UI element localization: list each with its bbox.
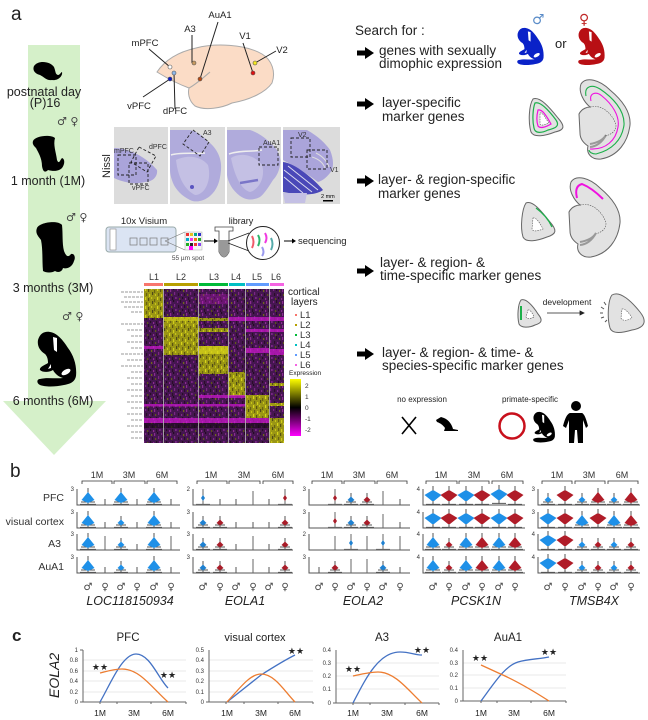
region labels: AuA1 [208, 10, 232, 21]
violin gene: EOLA1: EOLA1 [225, 594, 265, 608]
chart: PFC [70, 632, 186, 718]
arrow 5 [357, 348, 374, 360]
violin gene: LOC118150934: ♀ [101, 582, 109, 593]
chart: A3: A3 [375, 632, 389, 644]
icon: 1 month monkey [33, 136, 64, 172]
label: primate-specific: primate-specific [502, 395, 558, 404]
heading: search for: Search for : [355, 23, 425, 38]
violin gene: TMSB4X: ♀ [627, 582, 635, 593]
row labels: AuA1 [38, 561, 64, 573]
label: 10x Visium: 10x Visium [121, 216, 167, 227]
cortical layers legend: cortical [288, 287, 320, 298]
cortical layers legend: L2 [300, 320, 311, 331]
layer labels [149, 272, 281, 282]
violin gene: EOLA2: 3 [303, 555, 307, 561]
violin gene: LOC118150934: 3 [71, 555, 75, 561]
violin gene: PCSK1N: 4 [417, 510, 421, 516]
expression colorbar: -1 [305, 416, 311, 423]
text: layer specific: layer-specific [382, 95, 461, 110]
panel label b: b [10, 461, 21, 482]
heatmap [121, 272, 322, 443]
label: development: development [543, 297, 592, 307]
text: layer region time: time-specific marker genes [380, 268, 542, 283]
violin gene: PCSK1N: ♂ [429, 582, 438, 593]
violin gene: EOLA2: ♂ [347, 582, 356, 593]
chart: visual cortex: 0.1 [196, 690, 205, 696]
text: layer region time: layer- & region- & [380, 255, 485, 270]
chart: PFC: 3M [128, 708, 140, 718]
chart: visual cortex: 0.2 [196, 679, 205, 685]
icon: red monkey [578, 28, 605, 65]
icon: X [402, 417, 416, 434]
violin gene: EOLA2: 3 [303, 487, 307, 493]
label: 6 months: 6 months (6M) [13, 394, 93, 408]
violin gene: EOLA2: ♀ [363, 582, 371, 593]
chart: visual cortex: 0 [201, 700, 205, 706]
column separators [164, 289, 270, 443]
violin gene: EOLA1: 3 [187, 510, 191, 516]
Nissl sections [114, 127, 340, 204]
section with dashes [608, 294, 644, 332]
section labels: dPFC [149, 144, 167, 151]
male symbol: ♂ [532, 12, 545, 28]
icon: red circle [500, 414, 524, 438]
section labels [114, 130, 339, 200]
violin gene: PCSK1N: ♀ [511, 582, 519, 593]
chart: AuA1: 6M [543, 708, 555, 718]
label: no expression: no expression [397, 395, 447, 404]
violin gene: LOC118150934: 3 [71, 487, 75, 493]
layer labels: L1 [149, 272, 159, 282]
chart: PFC: PFC [116, 632, 140, 644]
text: layer region time species: species-specific marker genes [382, 358, 564, 373]
chart: PFC: ★★ [160, 670, 176, 680]
cortical layers legend: L6 [300, 360, 311, 371]
text: layer region time species: layer- & region- & time- & [382, 345, 534, 360]
violin gene: EOLA2: 2 [303, 532, 307, 538]
violin gene: EOLA1: 3 [187, 555, 191, 561]
chart: AuA1: ★★ [472, 653, 488, 663]
violin gene: EOLA1: ♀ [216, 582, 224, 593]
violin gene: LOC118150934: LOC118150934 [86, 594, 174, 608]
icon: blue monkey [517, 28, 544, 65]
search panel [355, 12, 644, 443]
violin gene: EOLA1: ♀ [281, 582, 289, 593]
cortical layers legend [288, 287, 320, 371]
section labels: AuA1 [263, 140, 280, 147]
repressed stripes [144, 294, 284, 423]
violin gene: EOLA1: 2 [187, 487, 191, 493]
cortical layers legend: L4 [300, 340, 311, 351]
layer labels: L3 [209, 272, 219, 282]
violin gene: TMSB4X: 3 [532, 510, 536, 516]
cortical layers legend: L5 [300, 350, 311, 361]
chart: A3: 0.1 [323, 687, 332, 693]
chart: PFC: ★★ [92, 662, 108, 672]
sex symbols 6M: ♂ ♀ [62, 310, 83, 323]
row labels: visual cortex [6, 516, 65, 528]
arrow 3 [357, 175, 374, 187]
panel label a: a [11, 4, 22, 25]
violin gene: LOC118150934: 1M [91, 470, 103, 480]
violin gene: PCSK1N: PCSK1N [451, 594, 502, 608]
development sequence [518, 294, 644, 332]
region dots [168, 61, 257, 81]
violin gene: EOLA1: ♂ [199, 582, 208, 593]
icon: 6 month monkey [37, 332, 76, 386]
icon: human [563, 401, 588, 443]
sections: layer-specific [529, 80, 630, 159]
chart: PFC: 1M [94, 708, 106, 718]
chart: visual cortex: 1M [221, 708, 233, 718]
violin gene: EOLA1: 3 [187, 532, 191, 538]
chart: AuA1: 0.3 [450, 661, 459, 667]
violin gene: PCSK1N: ♂ [495, 582, 504, 593]
sex symbols 3M: ♂ ♀ [66, 211, 87, 224]
layer color bar [144, 283, 284, 286]
layer labels: L6 [271, 272, 281, 282]
label: postnatal day (P)16: (P)16 [30, 96, 60, 110]
panel label c: c [12, 626, 21, 645]
violin gene: EOLA1: ♀ [249, 582, 257, 593]
chart: visual cortex: 0.5 [196, 648, 205, 654]
chart: visual cortex: 0.3 [196, 669, 205, 675]
section labels: V2 [298, 132, 307, 139]
arrow: development [547, 311, 584, 315]
chart: PFC: 0.6 [70, 669, 79, 675]
violin gene: LOC118150934: ♀ [133, 582, 141, 593]
expression colorbar: 0 [305, 405, 309, 412]
violin gene: PCSK1N: ♀ [445, 582, 453, 593]
layer labels: L2 [176, 272, 186, 282]
violin gene: EOLA2 [303, 470, 410, 608]
violin gene: EOLA2: ♂ [379, 582, 388, 593]
violin gene: TMSB4X: ♂ [578, 582, 587, 593]
chart: A3: 3M [381, 708, 393, 718]
violin gene: TMSB4X: 4 [532, 532, 536, 538]
chart: A3: 0.4 [323, 648, 332, 654]
region labels: dPFC [163, 106, 187, 117]
expression colorbar: 1 [305, 394, 309, 401]
region labels: mPFC [132, 38, 159, 49]
violin gene: PCSK1N: 6M [501, 470, 513, 480]
expression blocks [144, 289, 284, 443]
expression colorbar: 2 [305, 383, 309, 390]
chart: PFC: 0.8 [70, 658, 79, 664]
chart: AuA1 [450, 632, 566, 718]
region labels: A3 [184, 24, 196, 35]
violin gene: EOLA2: 1M [321, 470, 333, 480]
violin gene: LOC118150934: ♂ [117, 582, 126, 593]
row labels: A3 [48, 538, 61, 550]
chart: visual cortex: 6M [289, 708, 301, 718]
violin gene: EOLA2: ♀ [396, 582, 404, 593]
violin gene: TMSB4X: ♀ [561, 582, 569, 593]
violin gene: PCSK1N: ♀ [478, 582, 486, 593]
chart: AuA1: 0 [455, 699, 459, 705]
violin gene: EOLA2: 3 [303, 510, 307, 516]
violin gene: EOLA1: ♂ [265, 582, 274, 593]
chart: A3: 0.3 [323, 661, 332, 667]
tube [215, 227, 249, 257]
chart: AuA1: 3M [508, 708, 520, 718]
library circle [246, 226, 280, 260]
chart: A3: 0.2 [323, 674, 332, 680]
violin gene: EOLA2: 6M [386, 470, 398, 480]
violin gene: EOLA2: ♂ [315, 582, 324, 593]
violin gene: PCSK1N: 4 [417, 532, 421, 538]
region labels [127, 10, 288, 117]
arrow 4 [357, 265, 374, 277]
violin gene: EOLA1: 6M [272, 470, 284, 480]
chart: A3: 1M [347, 708, 359, 718]
region labels: V2 [276, 45, 288, 56]
label: library: library [229, 216, 254, 226]
section labels: A3 [203, 130, 212, 137]
chart: AuA1: ★★ [541, 647, 557, 657]
chart: visual cortex [196, 632, 313, 718]
label: 1 month: 1 month (1M) [11, 174, 85, 188]
timeline arrow [3, 45, 106, 455]
chart: A3: ★★ [345, 664, 361, 674]
arrow 1 [357, 47, 374, 59]
text: sexually dimorphic: dimophic expression [379, 56, 502, 71]
violin gene: TMSB4X: 1M [551, 470, 563, 480]
violin gene: TMSB4X: 3 [532, 487, 536, 493]
sex symbols P16: ♂ ♀ [57, 115, 78, 128]
region labels: V1 [239, 31, 251, 42]
label: 55 um spot: 55 µm spot [172, 255, 204, 262]
arrow 2 [357, 98, 374, 110]
expression colorbar [289, 370, 322, 436]
icon: postnatal day 16 monkey [33, 62, 62, 80]
region boxes [118, 130, 327, 184]
layer labels: L4 [231, 272, 241, 282]
violin gene: LOC118150934: ♀ [167, 582, 175, 593]
chart: AuA1: 0.4 [450, 648, 459, 654]
section labels: vPFC [132, 185, 150, 192]
Visium workflow [106, 216, 347, 262]
chart: PFC: 6M [162, 708, 174, 718]
expression colorbar: -2 [305, 427, 311, 434]
chart: AuA1: 0.2 [450, 673, 459, 679]
violin gene: TMSB4X: TMSB4X [569, 594, 620, 608]
violin gene: EOLA1: ♂ [232, 582, 241, 593]
chart: PFC: 0.2 [70, 690, 79, 696]
female symbol: ♀ [579, 12, 589, 28]
label: postnatal day (P)16: postnatal day [7, 85, 82, 99]
chart: AuA1: 1M [475, 708, 487, 718]
label: Nissl: Nissl [101, 154, 113, 178]
violin gene: TMSB4X [532, 470, 640, 608]
chart: AuA1: AuA1 [494, 632, 522, 644]
violin gene: PCSK1N: ♂ [462, 582, 471, 593]
expression colorbar: Expression [289, 370, 322, 377]
y axis label EOLA2: EOLA2 [46, 653, 62, 698]
gene label ticks [121, 292, 143, 438]
violin gene: LOC118150934: ♂ [150, 582, 159, 593]
text: layer region: layer- & region-specific [378, 172, 516, 187]
cortical layers legend: L1 [300, 310, 311, 321]
violin gene: EOLA2: EOLA2 [343, 594, 383, 608]
violin gene: PCSK1N: 3M [468, 470, 480, 480]
chart: visual cortex: 3M [255, 708, 267, 718]
layer labels: L5 [252, 272, 262, 282]
chart: PFC: 0 [75, 700, 79, 706]
section labels: V1 [330, 167, 339, 174]
violin gene: PCSK1N: 4 [417, 555, 421, 561]
chart: PFC: 0.4 [70, 679, 79, 685]
violin gene: EOLA1: 3M [238, 470, 250, 480]
icon: 3 month monkey [36, 222, 75, 272]
violin gene: LOC118150934: 3 [71, 532, 75, 538]
violin gene: PCSK1N: 4 [417, 487, 421, 493]
violin gene: TMSB4X: ♀ [594, 582, 602, 593]
chart: A3 [323, 632, 439, 718]
violin gene: TMSB4X: 6M [616, 470, 628, 480]
chart: A3: 6M [416, 708, 428, 718]
chart: PFC: 1 [75, 648, 79, 654]
chart: A3: ★★ [414, 645, 430, 655]
brain diagram [127, 10, 288, 117]
violin gene: EOLA2: 3M [353, 470, 365, 480]
row labels [6, 492, 65, 573]
violin gene: LOC118150934: 6M [156, 470, 168, 480]
violin gene: TMSB4X: 3M [583, 470, 595, 480]
cortical layers legend: layers [291, 297, 318, 308]
cortical layers legend: L3 [300, 330, 311, 341]
text: or: or [555, 36, 567, 51]
region labels: vPFC [127, 101, 151, 112]
section labels: mPFC [114, 148, 134, 155]
violin gene: EOLA2: ♀ [331, 582, 339, 593]
text: layer specific: marker genes [382, 109, 465, 124]
sections: layer and region [522, 178, 620, 257]
section labels: 2 mm [321, 194, 335, 200]
chart: A3: 0 [328, 701, 332, 707]
violin gene: LOC118150934 [71, 470, 180, 608]
icon: primate [533, 412, 555, 443]
chart: AuA1: 0.1 [450, 686, 459, 692]
violin gene: PCSK1N [417, 470, 525, 608]
chart: visual cortex: ★★ [288, 646, 304, 656]
violin gene: EOLA1: 1M [205, 470, 217, 480]
spot grid [185, 232, 202, 250]
label: 3 months: 3 months (3M) [13, 281, 93, 295]
violin gene: LOC118150934: ♂ [84, 582, 93, 593]
violin gene: TMSB4X: ♂ [610, 582, 619, 593]
violin gene: LOC118150934: 3 [71, 510, 75, 516]
text: layer region: marker genes [378, 186, 461, 201]
violin gene: LOC118150934: 3M [123, 470, 135, 480]
chart: visual cortex: 0.4 [196, 658, 205, 664]
violin gene: TMSB4X: 4 [532, 555, 536, 561]
row labels: PFC [43, 492, 64, 504]
violin gene: TMSB4X: ♂ [544, 582, 553, 593]
icon: mouse [436, 417, 458, 431]
label: sequencing: sequencing [298, 236, 347, 247]
violin gene: EOLA1 [187, 470, 293, 608]
text: sexually dimorphic: genes with sexually [379, 43, 496, 58]
chart: visual cortex: visual cortex [224, 632, 286, 644]
violin gene: PCSK1N: 1M [435, 470, 447, 480]
slide [106, 227, 176, 252]
